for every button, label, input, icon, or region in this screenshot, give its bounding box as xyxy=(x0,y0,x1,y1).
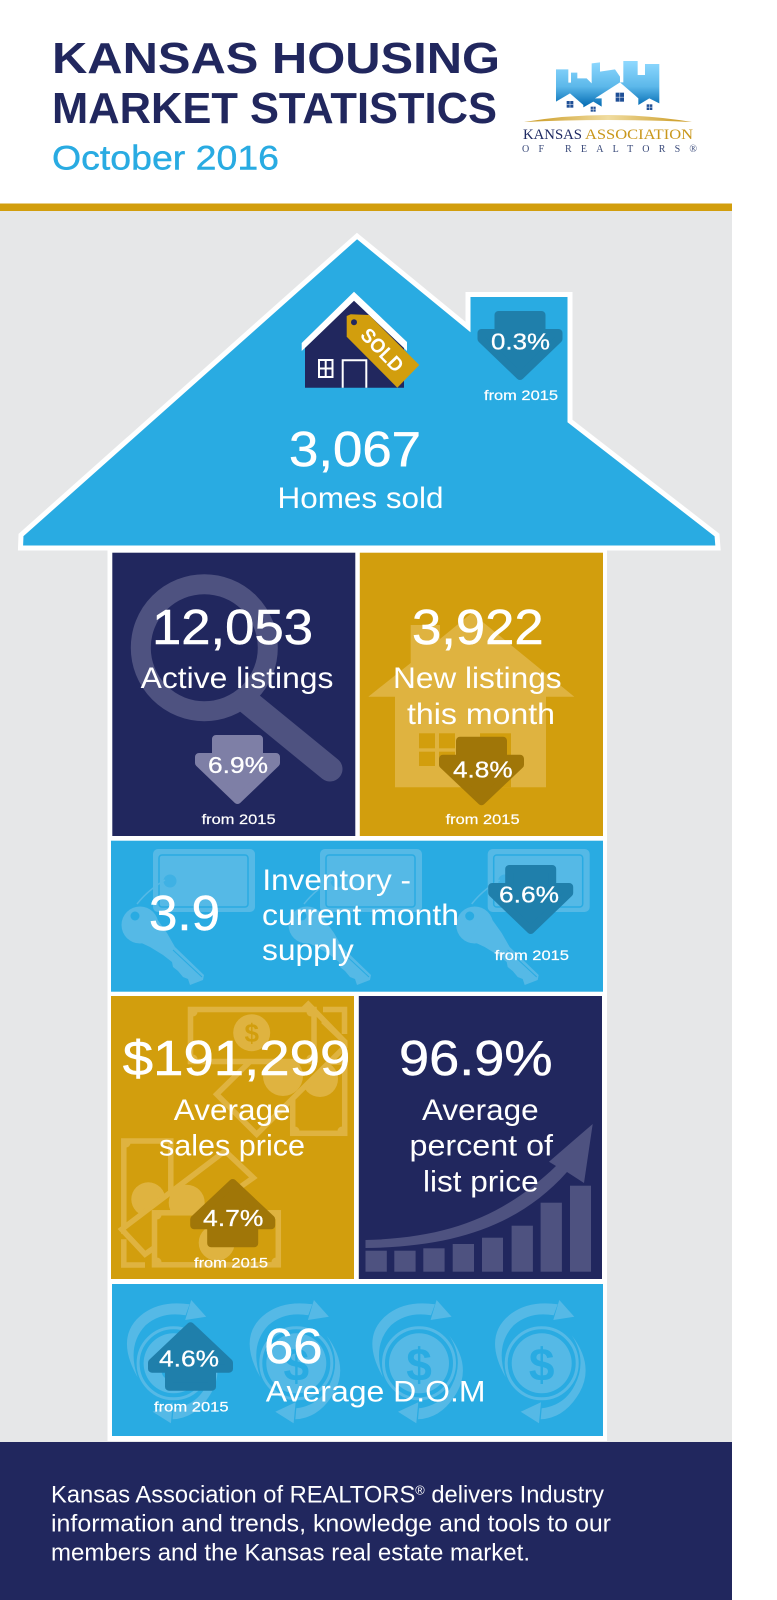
panel: inventory: current month xyxy=(262,899,459,932)
panel: active listings: 12,053 xyxy=(152,601,313,655)
arrow: down 0.3% xyxy=(482,315,558,403)
panel: average sales price xyxy=(111,996,354,1279)
footer text: Kansas Association of REALTORS xyxy=(51,1482,420,1509)
footer text: delivers Industry xyxy=(425,1482,604,1509)
panel: inventory: 3.9 xyxy=(149,887,220,941)
gold divider bar xyxy=(0,204,732,211)
arrow: up 4.7%: from 2015 xyxy=(194,1254,268,1270)
panel: new listings: 3,922 xyxy=(412,601,544,655)
subtitle: date: October 2016 xyxy=(52,140,279,178)
panel: average percent of list price xyxy=(359,996,602,1279)
arrow: down 6.9%: from 2015 xyxy=(202,811,276,827)
arrow: up 4.6%: 4.6% xyxy=(159,1346,219,1372)
icon: dollar cycle watermark 2: $ xyxy=(284,1338,309,1390)
logo: Kansas Association of Realtors: ASSOCIATION xyxy=(585,127,693,143)
footer text xyxy=(51,1482,611,1567)
panel: new listings: this month xyxy=(407,698,555,731)
panel: average percent of list price: list price xyxy=(423,1166,539,1199)
panel: inventory xyxy=(111,841,603,992)
panel: homes sold roof xyxy=(20,236,718,548)
arrow: down 4.8%: 4.8% xyxy=(453,757,513,783)
logo: Kansas Association of Realtors: KANSAS xyxy=(523,127,582,143)
stat: homes sold xyxy=(278,423,444,515)
footer text: members and the Kansas real estate market. xyxy=(51,1540,530,1567)
icon: dollar cycle watermark 1: $ xyxy=(161,1338,186,1390)
panel: average sales price: Average xyxy=(174,1094,290,1127)
panel: average percent of list price: 96.9% xyxy=(399,1032,552,1086)
panel: average percent of list price: percent of xyxy=(410,1130,554,1163)
arrow: down 6.6%: from 2015 xyxy=(495,947,569,963)
stat: homes sold: Homes sold xyxy=(278,482,444,515)
panel: average days on market xyxy=(112,1284,603,1436)
footer xyxy=(0,1442,732,1600)
panel: active listings: Active listings xyxy=(141,662,333,695)
panel: average sales price: sales price xyxy=(159,1130,305,1163)
icon: house watermark xyxy=(368,613,574,787)
arrow: down 4.8% xyxy=(443,741,520,827)
panel: active listings xyxy=(112,553,355,836)
panel: new listings xyxy=(360,553,603,836)
chart: rising bars and arrow xyxy=(366,1124,593,1272)
title: MARKET STATISTICS xyxy=(52,84,497,133)
panel: inventory: supply xyxy=(262,934,354,967)
panel: average days on market: 66 xyxy=(264,1320,323,1374)
arrow: up 4.6% xyxy=(152,1326,229,1415)
panel: average days on market: Average D.O.M xyxy=(266,1376,486,1409)
arrow: down 0.3%: from 2015 xyxy=(484,387,558,403)
icon: dollar cycle watermark 4: $ xyxy=(529,1338,554,1390)
arrow: down 4.8%: from 2015 xyxy=(446,811,520,827)
arrow: down 6.9%: 6.9% xyxy=(208,752,268,778)
logo: Kansas Association of Realtors xyxy=(522,61,697,155)
logo: Kansas Association of Realtors: OF REALTORS® xyxy=(522,144,697,155)
icon: key and card watermark 1 xyxy=(122,849,255,985)
icon: magnifier xyxy=(141,584,330,769)
icon: dollar cycle watermark 2 xyxy=(250,1300,340,1423)
arrow: down 6.6% xyxy=(492,869,569,963)
title xyxy=(52,34,500,133)
icon: sold house xyxy=(302,292,419,388)
panel: average percent of list price: Average xyxy=(422,1094,539,1127)
icon: sold house: SOLD xyxy=(356,324,408,377)
arrow: up 4.7% xyxy=(194,1183,271,1270)
title: KANSAS HOUSING xyxy=(52,34,500,83)
header xyxy=(52,34,697,178)
icon: money watermark xyxy=(122,1004,347,1266)
arrow: up 4.6%: from 2015 xyxy=(154,1399,229,1415)
arrow: up 4.7%: 4.7% xyxy=(203,1205,263,1231)
icon: dollar cycle watermark 3 xyxy=(372,1300,463,1423)
background panel xyxy=(0,210,732,1443)
panel: new listings: New listings xyxy=(393,662,562,695)
icon: dollar cycle watermark 3: $ xyxy=(406,1338,432,1390)
white house body backing xyxy=(108,545,607,1441)
arrow: down 6.9% xyxy=(199,739,276,827)
icon: dollar cycle watermark 1 xyxy=(127,1300,218,1423)
panel: inventory: Inventory - xyxy=(262,864,411,897)
footer text: ® xyxy=(415,1483,425,1498)
arrow: down 6.6%: 6.6% xyxy=(499,882,559,908)
icon: key and card watermark 3 xyxy=(456,849,590,985)
arrow: down 0.3%: 0.3% xyxy=(491,328,550,354)
icon: dollar cycle watermark 4 xyxy=(495,1300,586,1423)
icon: key and card watermark 2 xyxy=(288,849,422,985)
footer text: information and trends, knowledge and tools to our xyxy=(51,1511,611,1538)
icon: money watermark: $ xyxy=(244,1018,259,1048)
panel: average sales price: $191,299 xyxy=(123,1032,350,1086)
stat: homes sold: 3,067 xyxy=(289,423,421,477)
